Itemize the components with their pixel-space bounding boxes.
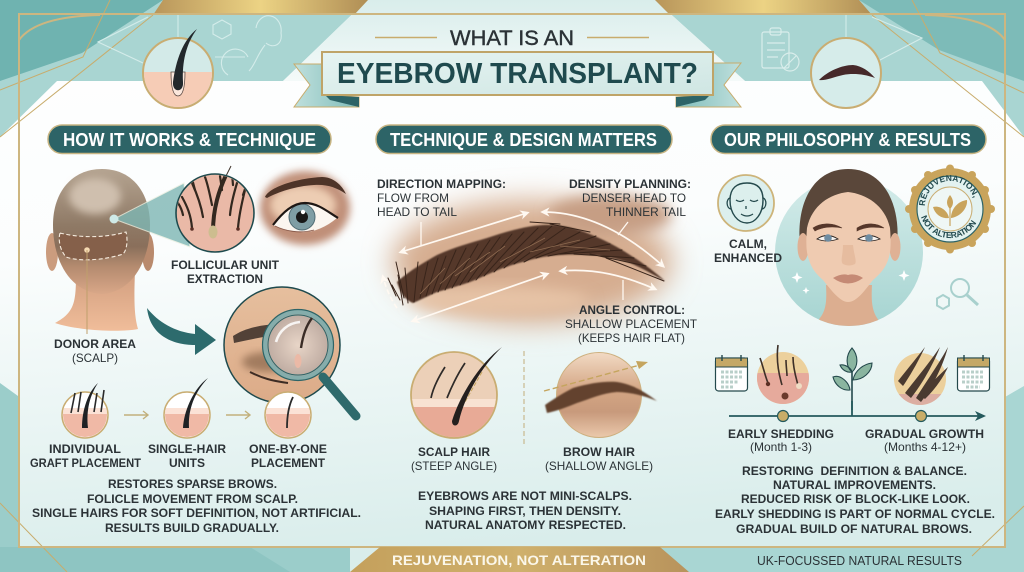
label: density planning	[569, 177, 691, 219]
icon: one-by-one placement	[262, 392, 312, 440]
label: early shedding: EARLY SHEDDING	[728, 427, 834, 441]
title	[294, 27, 741, 107]
label: calm, enhanced	[714, 237, 782, 265]
callout cone to follicle	[114, 183, 190, 247]
section heading: how it works: HOW IT WORKS & TECHNIQUE	[63, 130, 316, 150]
text block: technique summary: EYEBROWS ARE NOT MINI-SCALPS.	[418, 489, 632, 503]
section heading: how it works	[48, 125, 331, 154]
title: EYEBROW TRANSPLANT?	[337, 58, 698, 90]
illustration: eye with brow	[260, 171, 350, 245]
label: calm, enhanced: ENHANCED	[714, 251, 782, 265]
text block: philosophy summary: EARLY SHEDDING IS PART OF NORMAL CYCLE.	[715, 507, 995, 521]
section heading: philosophy and results	[711, 125, 986, 154]
label: donor area: DONOR AREA	[54, 337, 136, 351]
label: angle control: SHALLOW PLACEMENT	[565, 317, 698, 331]
label: brow hair	[545, 445, 653, 473]
label: angle control: (KEEPS HAIR FLAT)	[578, 331, 685, 345]
label: donor area	[54, 337, 136, 365]
step labels: UNITS	[169, 456, 205, 470]
text block: philosophy summary: NATURAL IMPROVEMENTS.	[773, 478, 936, 492]
step labels: PLACEMENT	[251, 456, 326, 470]
text block: how it works summary: FOLICLE MOVEMENT FROM SCALP.	[87, 492, 298, 506]
label: follicular unit extraction: EXTRACTION	[187, 272, 263, 286]
step labels: INDIVIDUAL	[49, 442, 121, 456]
label: density planning: DENSER HEAD TO	[582, 191, 686, 205]
divider	[523, 351, 525, 445]
illustration: woman's face	[775, 169, 923, 330]
section heading: technique and design: TECHNIQUE & DESIGN MATTERS	[390, 130, 657, 150]
badge: rejuvenation not alteration: REJUVENATION,	[919, 175, 978, 206]
icon: calendar left	[716, 355, 748, 391]
panel: philosophy and results	[714, 164, 995, 536]
gold header ribbon left	[153, 0, 368, 15]
illustration: follicle close-up	[176, 166, 254, 252]
label: direction mapping: HEAD TO TAIL	[377, 205, 457, 219]
panel: technique and design	[377, 177, 698, 532]
arrow: graft to single hair	[124, 411, 148, 419]
panel: how it works	[30, 166, 361, 535]
text block: technique summary: SHAPING FIRST, THEN DENSITY.	[429, 504, 621, 518]
text block: philosophy summary: GRADUAL BUILD OF NATURAL BROWS.	[736, 522, 972, 536]
label: angle control: ANGLE CONTROL:	[579, 303, 685, 317]
label: direction mapping: FLOW FROM	[377, 191, 449, 205]
section heading: philosophy and results: OUR PHILOSOPHY & RESULTS	[724, 130, 971, 150]
label: direction mapping: DIRECTION MAPPING:	[377, 177, 506, 191]
arrow: single hair to placement	[226, 411, 250, 419]
title: WHAT IS AN	[450, 27, 574, 50]
label: early shedding: (Month 1-3)	[750, 440, 812, 454]
badge: rejuvenation not alteration: NOT ALTERATION	[921, 215, 976, 238]
text block: philosophy summary: RESTORING DEFINITION & BALANCE.	[742, 464, 967, 478]
label: brow hair: BROW HAIR	[563, 445, 635, 459]
text block: how it works summary: SINGLE HAIRS FOR SOFT DEFINITION, NOT ARTIFICIAL.	[32, 506, 361, 520]
mapping arrows	[383, 212, 663, 321]
text block: how it works summary	[32, 477, 361, 535]
icon: scalp hair steep angle	[411, 347, 502, 440]
label: scalp hair	[411, 445, 497, 473]
label: gradual growth: (Months 4-12+)	[884, 440, 966, 454]
step labels: SINGLE-HAIR	[148, 442, 226, 456]
step labels: ONE-BY-ONE	[249, 442, 327, 456]
section heading: technique and design	[376, 125, 672, 154]
label: density planning: DENSITY PLANNING:	[569, 177, 691, 191]
step labels	[30, 442, 327, 470]
label: brow hair: (SHALLOW ANGLE)	[545, 459, 653, 473]
text block: philosophy summary: REDUCED RISK OF BLOCK-LIKE LOOK.	[741, 492, 970, 506]
timeline arrow	[729, 401, 986, 422]
label: scalp hair: SCALP HAIR	[418, 445, 490, 459]
icon: individual graft placement	[60, 383, 110, 440]
callout dot	[110, 214, 118, 224]
badge: rejuvenation not alteration	[905, 164, 995, 254]
label: direction mapping	[377, 177, 506, 219]
illustration: brow with magnifier	[224, 287, 356, 416]
icon: gradual growth	[894, 347, 948, 406]
icon: early shedding	[756, 345, 810, 407]
icon: calm face	[718, 175, 774, 231]
text block: how it works summary: RESULTS BUILD GRADUALLY.	[105, 521, 279, 535]
footer ribbon: REJUVENATION, NOT ALTERATION	[392, 552, 646, 568]
icon: calendar right	[958, 355, 990, 391]
icon: eyebrow circle	[811, 38, 881, 108]
gold header ribbon right	[655, 0, 872, 15]
label: scalp hair: (STEEP ANGLE)	[411, 459, 497, 473]
label: gradual growth	[865, 427, 984, 454]
illustration: brow on skin with mapping arrows	[383, 195, 672, 324]
label: density planning: THINNER TAIL	[606, 205, 686, 219]
icon: magnifier and molecule	[937, 279, 978, 309]
icon: sprout	[833, 348, 872, 410]
label: angle control	[565, 303, 698, 345]
label: gradual growth: GRADUAL GROWTH	[865, 427, 984, 441]
step labels: GRAFT PLACEMENT	[30, 456, 142, 470]
text block: technique summary: NATURAL ANATOMY RESPECTED.	[425, 518, 626, 532]
label: donor area: (SCALP)	[72, 351, 118, 365]
text block: how it works summary: RESTORES SPARSE BROWS.	[108, 477, 277, 491]
footer note: UK-FOCUSSED NATURAL RESULTS	[757, 553, 962, 568]
label: calm, enhanced: CALM,	[729, 237, 767, 251]
arrow: scalp to brow	[147, 308, 216, 355]
text block: philosophy summary	[715, 464, 995, 536]
label: early shedding	[728, 427, 834, 454]
footer ribbon	[350, 547, 689, 572]
title ribbon tails	[294, 63, 741, 107]
illustration: back of head with donor area	[46, 169, 154, 334]
icon: decorative clipboard	[762, 28, 799, 71]
text block: technique summary	[418, 489, 632, 532]
icon: brow hair shallow angle	[544, 352, 657, 438]
label: follicular unit extraction: FOLLICULAR UNIT	[171, 258, 280, 272]
icon: single-hair units	[160, 378, 210, 440]
icon: hair follicle circle	[143, 29, 213, 109]
label: follicular unit extraction	[171, 258, 280, 286]
